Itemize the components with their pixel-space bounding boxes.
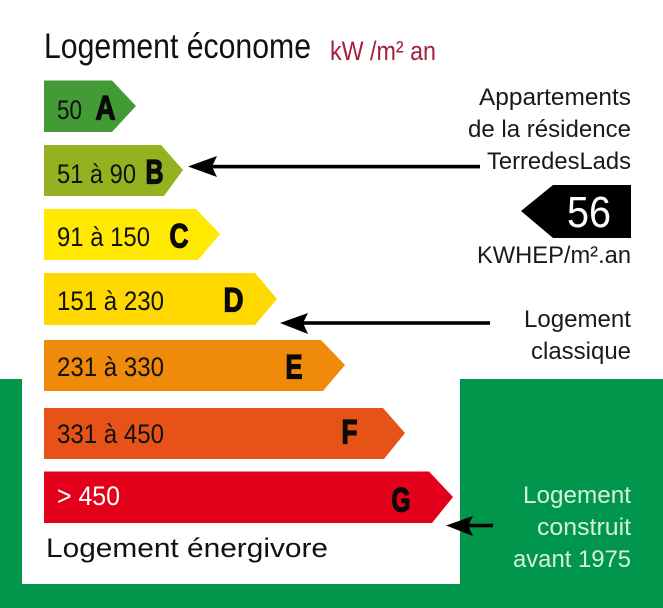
rating bar B bbox=[44, 145, 183, 196]
callout: standard housing: Logement bbox=[524, 306, 631, 333]
rating bar C bbox=[44, 209, 220, 260]
rating bar F: 331 à 450 bbox=[57, 419, 164, 449]
rating bar D: 151 à 230 bbox=[57, 286, 164, 316]
callout: residence text bbox=[468, 84, 631, 175]
arrow to class D bbox=[280, 313, 490, 334]
rating bar A bbox=[44, 80, 136, 132]
callout: pre-1975 housing bbox=[513, 482, 631, 573]
callout: residence text: de la résidence bbox=[468, 116, 631, 143]
black value tag: 56 bbox=[567, 188, 611, 237]
title: Logement économe bbox=[44, 27, 311, 66]
rating bar C: 91 à 150 bbox=[57, 222, 150, 252]
rating bar E: E bbox=[286, 348, 302, 386]
rating bar B: 51 à 90 bbox=[57, 159, 136, 189]
unit label: kW /m² an bbox=[330, 36, 436, 66]
rating bar C: C bbox=[170, 218, 188, 256]
rating bar B: B bbox=[146, 154, 164, 192]
callout: pre-1975 housing: avant 1975 bbox=[513, 546, 631, 573]
black value tag bbox=[521, 185, 631, 238]
callout: standard housing bbox=[524, 306, 631, 365]
rating bar D bbox=[44, 273, 277, 325]
rating bar G: G bbox=[392, 482, 410, 520]
panel: green background with white inset bbox=[0, 379, 663, 608]
callout: pre-1975 housing: construit bbox=[537, 514, 631, 541]
callout: residence text: Appartements bbox=[479, 84, 631, 111]
callout: standard housing: classique bbox=[531, 338, 631, 365]
rating bar G: > 450 bbox=[57, 481, 120, 511]
rating bar E bbox=[44, 340, 345, 391]
rating bar A: A bbox=[96, 90, 116, 128]
callout: pre-1975 housing: Logement bbox=[523, 482, 631, 509]
rating bar D: D bbox=[224, 282, 244, 320]
rating bar E: 231 à 330 bbox=[57, 352, 164, 382]
callout: residence text: TerredesLads bbox=[487, 148, 631, 175]
rating bar G bbox=[44, 472, 453, 523]
arrow to class B bbox=[188, 156, 480, 177]
rating bar F bbox=[44, 408, 405, 459]
rating bar A: 50 bbox=[57, 95, 82, 125]
arrow to class G bbox=[446, 516, 493, 536]
bottom label: Logement énergivore bbox=[46, 533, 328, 563]
value unit: KWHEP/m².an bbox=[477, 242, 631, 269]
rating bar F: F bbox=[342, 414, 358, 452]
